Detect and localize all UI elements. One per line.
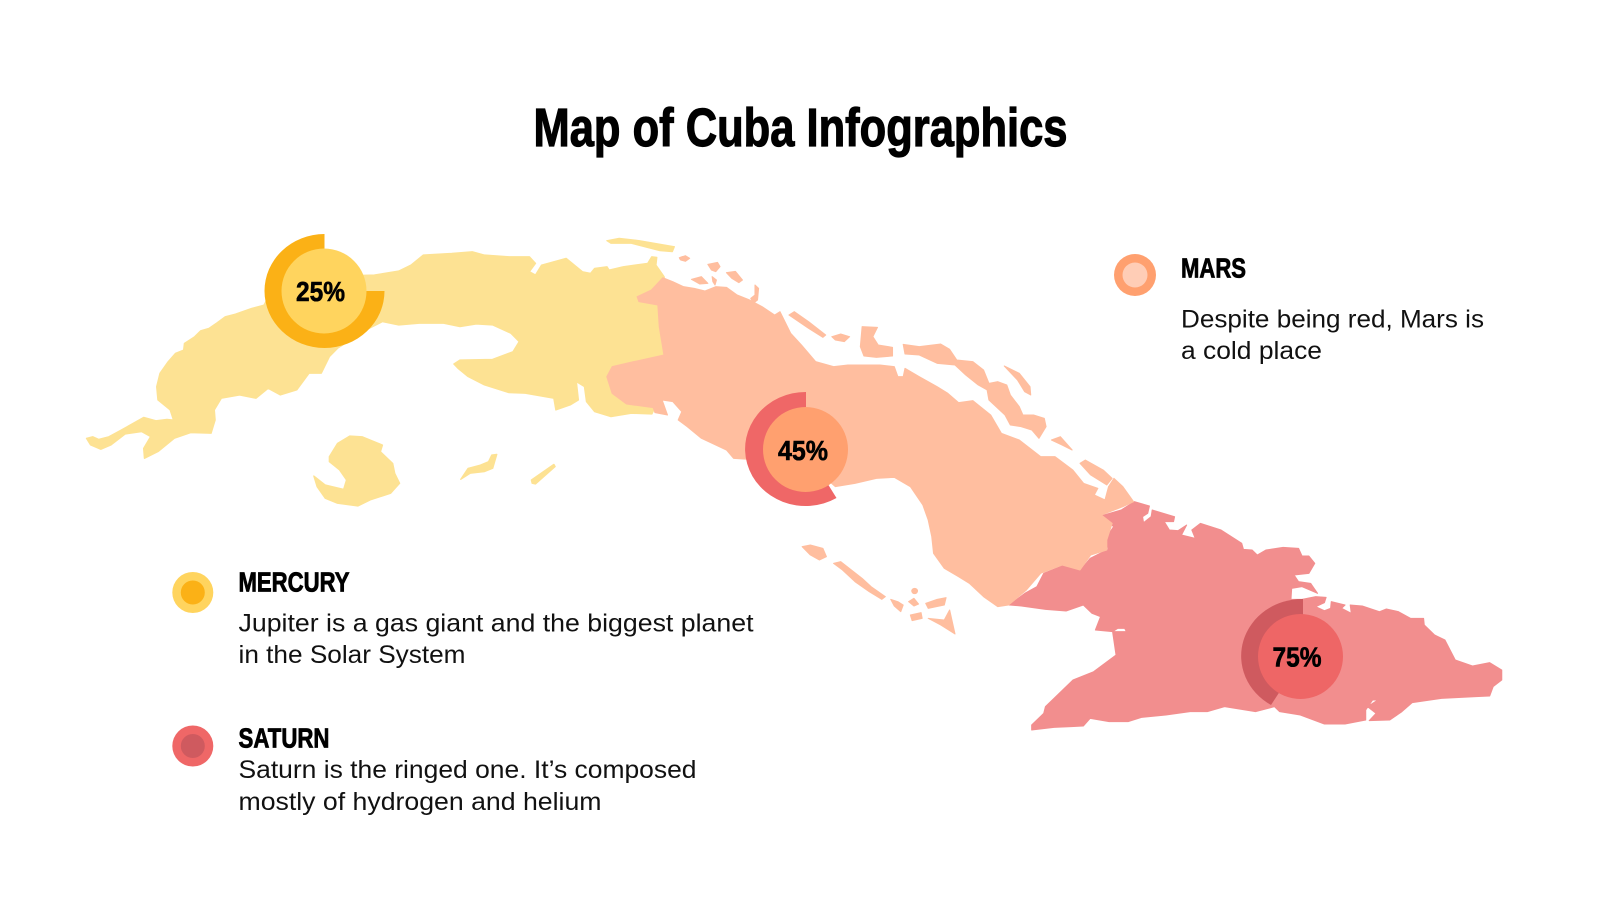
text: Saturn description: mostly of hydrogen and helium bbox=[238, 788, 602, 816]
heading: Saturn: SATURN bbox=[238, 722, 330, 754]
text: Saturn description: Saturn is the ringed one. It’s composed bbox=[238, 756, 696, 784]
marker: 75% bbox=[1241, 599, 1343, 705]
icon: Saturn dot bbox=[172, 726, 213, 766]
text: Mars description: a cold place bbox=[1181, 337, 1322, 365]
title: Map of Cuba Infographics bbox=[534, 98, 1068, 158]
heading: Mercury: MERCURY bbox=[238, 566, 350, 598]
marker: 25% bbox=[265, 234, 384, 348]
region: western Cuba (yellow) bbox=[87, 238, 674, 506]
region: central Cuba (orange) bbox=[607, 256, 1134, 634]
text: Mercury description: Jupiter is a gas giant and the biggest planet bbox=[238, 610, 754, 638]
marker: 75%: 75% bbox=[1272, 642, 1322, 672]
marker: 45%: 45% bbox=[778, 435, 828, 466]
heading: Mars: MARS bbox=[1181, 252, 1246, 284]
icon: Mercury dot bbox=[172, 572, 213, 613]
marker: 45% bbox=[745, 392, 848, 506]
text: Mercury description: in the Solar System bbox=[238, 641, 466, 669]
legend: Mars bbox=[1114, 252, 1484, 365]
map of Cuba bbox=[87, 238, 1502, 730]
small key north of central Cuba bbox=[679, 256, 689, 261]
region: eastern Cuba (red) bbox=[1009, 502, 1502, 730]
marker: 25%: 25% bbox=[296, 276, 345, 307]
legend: Saturn bbox=[172, 722, 697, 816]
icon: Mars dot bbox=[1114, 254, 1156, 296]
text: Mars description: Despite being red, Mars is bbox=[1181, 306, 1484, 334]
legend: Mercury bbox=[172, 566, 754, 669]
